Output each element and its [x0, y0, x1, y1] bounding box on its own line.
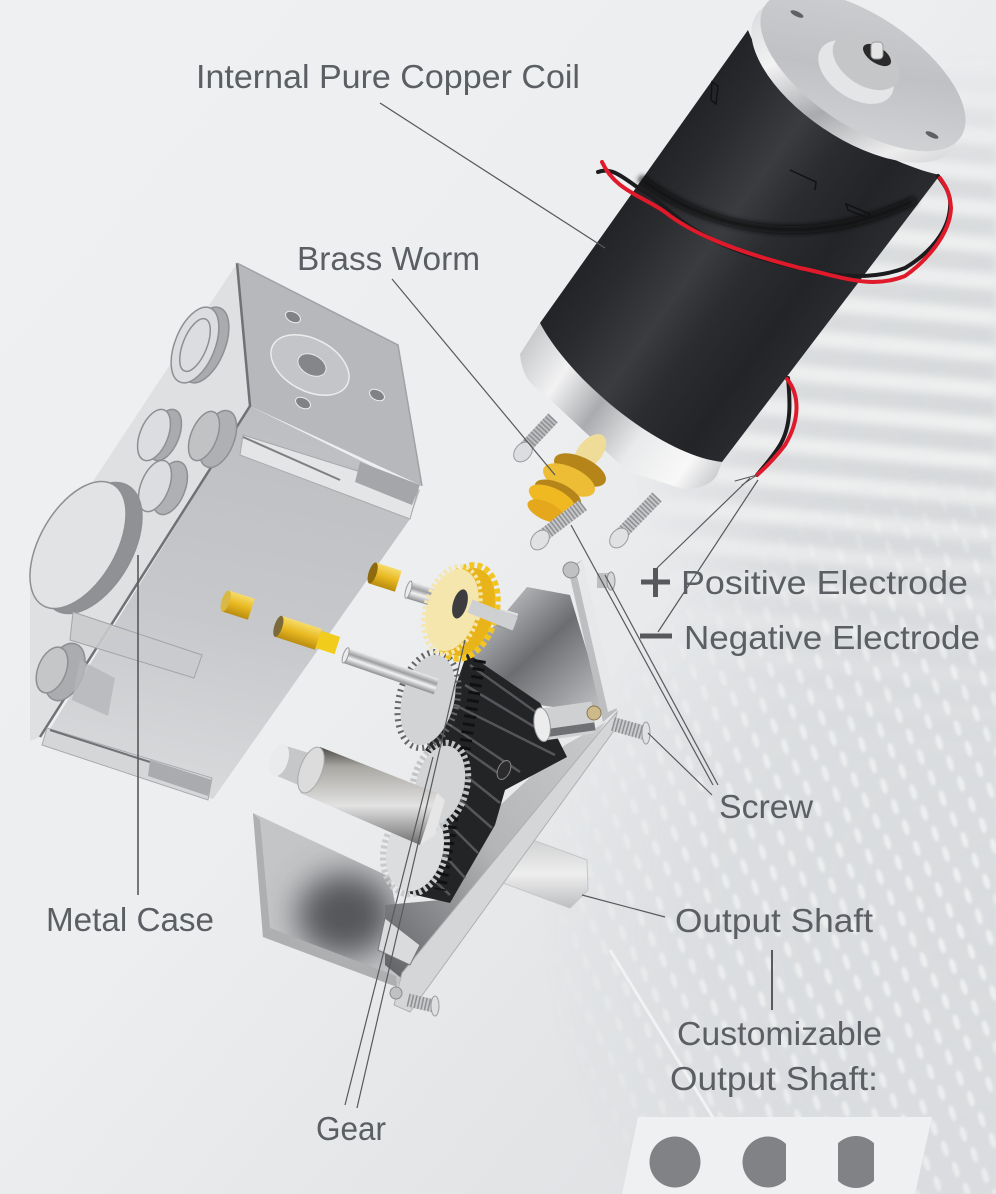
- hole in plate: [494, 758, 514, 782]
- label: customizable: Customizable: [677, 1015, 882, 1052]
- label: output shaft: Output Shaft: [675, 902, 873, 939]
- threaded stud: [72, 660, 115, 716]
- icon: plus: [641, 568, 670, 597]
- top plate hub and holes: [261, 309, 386, 411]
- brass worm: [524, 428, 613, 528]
- bottom cover plate: [253, 813, 407, 987]
- pillar: [532, 701, 596, 743]
- gray gear upper: [388, 645, 468, 755]
- label: internal pure copper coil: Internal Pure Copper Coil: [196, 58, 580, 95]
- gray gear lower: [374, 799, 456, 901]
- icon: minus: [640, 634, 672, 638]
- plate screw bottom: [408, 996, 439, 1016]
- plate screw top: [597, 572, 615, 590]
- label: gear: Gear: [316, 1110, 386, 1147]
- first shaft: [403, 580, 518, 631]
- front plate: [378, 560, 617, 1012]
- bushing top: [365, 561, 402, 592]
- shaft shape: single flat: [742, 1136, 786, 1188]
- label: screw: Screw: [719, 788, 813, 825]
- metal case: [10, 263, 422, 800]
- label: metal case: Metal Case: [46, 901, 214, 938]
- plate strip: [394, 712, 617, 1012]
- motor cap side: [724, 0, 986, 195]
- lower rod: [42, 728, 212, 800]
- case top plate: [237, 263, 422, 486]
- label: negative electrode: Negative Electrode: [684, 619, 980, 656]
- label: customizable output shaft: Output Shaft:: [670, 1060, 878, 1097]
- motor screw right: [606, 497, 657, 552]
- back plate behind gears: [385, 722, 606, 985]
- motor cap top: [734, 0, 992, 183]
- leader lines: [138, 103, 772, 1108]
- cable shadow: [640, 178, 915, 230]
- middle rod: [70, 612, 202, 678]
- shaft shape: round: [650, 1136, 700, 1188]
- gray gear middle: [403, 737, 477, 833]
- plate screw right: [613, 722, 650, 744]
- label: brass worm: Brass Worm: [297, 240, 480, 277]
- upper rod: [240, 435, 418, 519]
- gear train: [265, 558, 567, 903]
- bushing long: [271, 615, 341, 656]
- shaft shape: double flat: [838, 1136, 874, 1188]
- cap hub and pin: [790, 9, 939, 140]
- motor end ring: [520, 323, 722, 489]
- case main shell: [45, 406, 420, 799]
- lower cable: [735, 378, 797, 485]
- case end plate: [30, 263, 250, 741]
- bushing middle: [218, 589, 255, 620]
- second shaft: [341, 647, 439, 694]
- background: [383, 110, 996, 1194]
- panel: shaft shapes: [622, 1117, 932, 1194]
- upper cable: [598, 162, 951, 282]
- lower pillar: [378, 918, 420, 965]
- motor screw middle: [527, 505, 583, 554]
- output shaft: [503, 840, 588, 908]
- body slots: [711, 82, 870, 218]
- plate triangle strip: [568, 560, 617, 722]
- label: positive electrode: Positive Electrode: [681, 564, 968, 601]
- large output shaft cylinder: [265, 741, 445, 845]
- motor: [520, 0, 992, 489]
- motor screw left: [510, 418, 553, 466]
- gold bushings: [218, 561, 402, 656]
- nuts: [563, 562, 579, 578]
- bosses on end plate: [10, 300, 244, 707]
- motor body: [540, 30, 940, 462]
- black gear stack: [407, 653, 567, 903]
- inner plate: [467, 587, 606, 715]
- gold gear: [414, 558, 515, 666]
